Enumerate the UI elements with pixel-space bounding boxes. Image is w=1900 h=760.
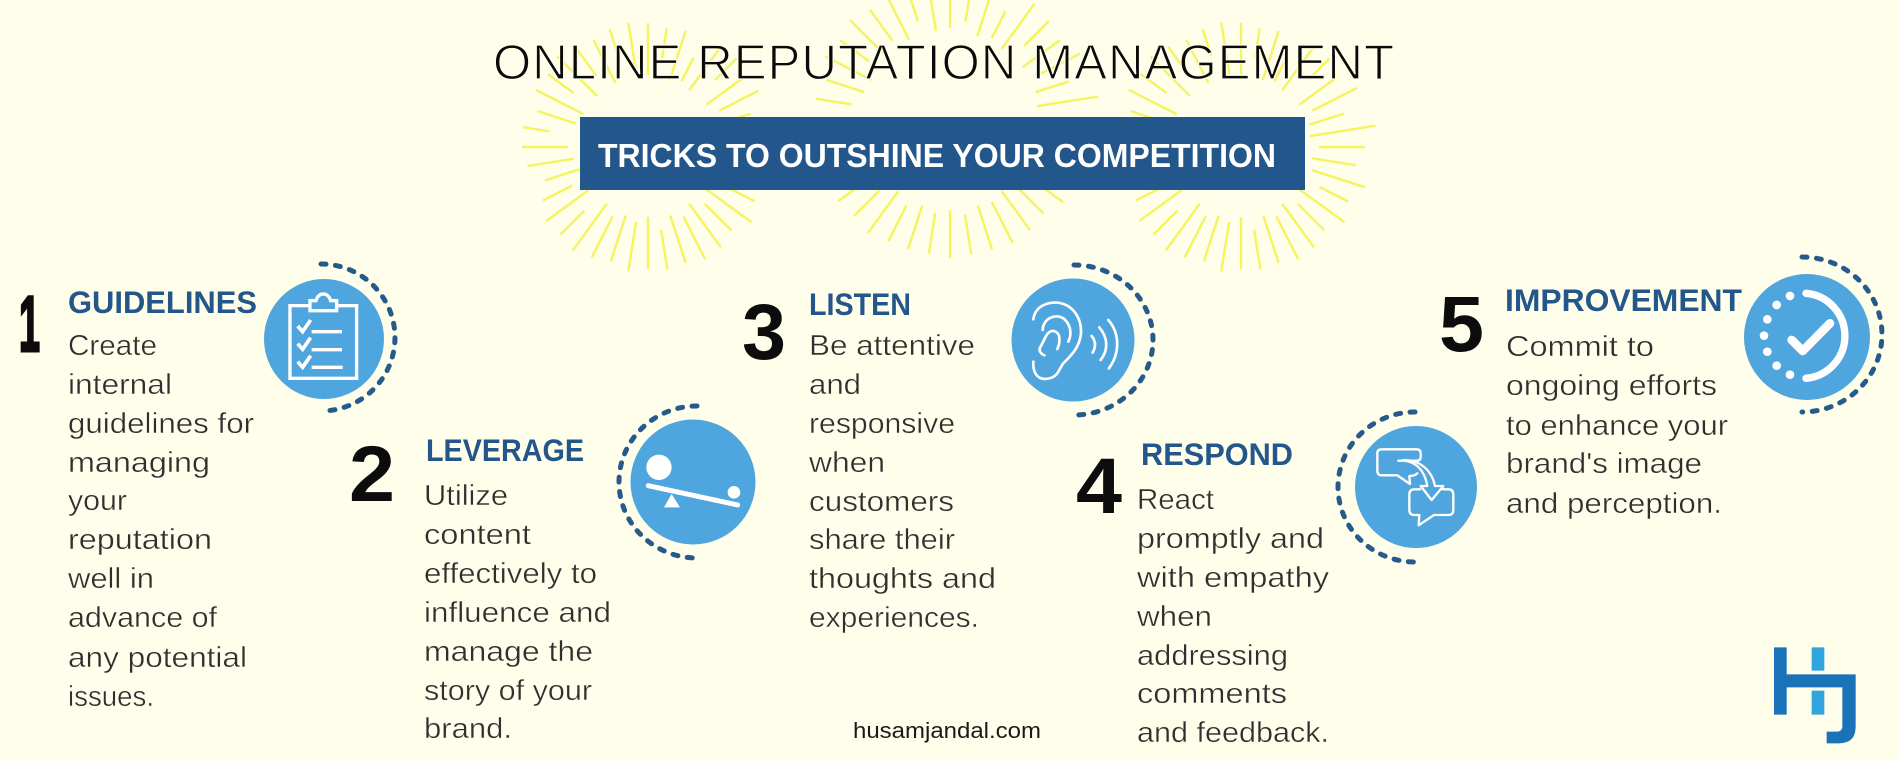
text: respond description (1136, 484, 1330, 749)
text: leverage description: content (424, 519, 531, 551)
icon: clipboard checklist (264, 264, 395, 411)
text: listen description: experiences. (809, 602, 979, 634)
text: respond description: promptly and (1137, 523, 1324, 555)
subtitle banner (580, 117, 1305, 190)
text: listen description: share their (809, 524, 955, 556)
step 4: respond (1076, 412, 1477, 749)
sunburst: right (1115, 23, 1375, 271)
text: respond description: addressing (1137, 640, 1288, 672)
text: listen description: thoughts and (809, 563, 996, 595)
logo: HJ (1774, 647, 1856, 743)
heading: listen: LISTEN (809, 286, 911, 322)
icon: chat bubbles (1338, 412, 1477, 562)
text: guidelines description: managing (68, 447, 210, 479)
text: guidelines description: internal (68, 369, 172, 401)
icon: ear (1012, 265, 1153, 415)
text: improvement description (1506, 331, 1728, 520)
subtitle banner: TRICKS TO OUTSHINE YOUR COMPETITION (598, 137, 1276, 174)
text: listen description: when (808, 447, 885, 479)
heading: guidelines: GUIDELINES (68, 284, 257, 320)
text: improvement description: ongoing efforts (1506, 370, 1717, 402)
text: improvement description: brand's image (1506, 448, 1702, 480)
text: respond description: React (1137, 484, 1214, 516)
sunburst: middle (810, 0, 1098, 258)
text: improvement description: and perception. (1506, 488, 1722, 520)
text: leverage description: manage the (424, 636, 593, 668)
text: respond description: with empathy (1136, 562, 1330, 594)
text: improvement description: to enhance your (1506, 410, 1728, 442)
number 4: 4 (1076, 441, 1122, 530)
text: guidelines description (67, 330, 254, 713)
text: guidelines description: well in (67, 563, 154, 595)
heading: leverage: LEVERAGE (426, 432, 584, 468)
number 2: 2 (349, 429, 395, 518)
step 1: guidelines (19, 264, 395, 713)
text: guidelines description: reputation (68, 524, 212, 556)
text: listen description: responsive (809, 408, 955, 440)
step 2: leverage (349, 406, 756, 745)
text: respond description: and feedback. (1137, 717, 1329, 749)
text: leverage description: effectively to (424, 558, 597, 590)
icon: progress check (1744, 257, 1882, 412)
text: leverage description: story of your (424, 675, 592, 707)
text: leverage description: brand. (424, 713, 512, 745)
text: respond description: when (1136, 601, 1212, 633)
text: guidelines description: advance of (68, 602, 218, 634)
number 3: 3 (742, 287, 786, 376)
sunburst: left (522, 23, 772, 271)
heading: respond: RESPOND (1141, 436, 1293, 472)
text: improvement description: Commit to (1506, 331, 1654, 363)
website footer: husamjandal.com (853, 718, 1041, 743)
text: guidelines description: Create (68, 330, 157, 362)
text: leverage description: influence and (424, 597, 611, 629)
text: listen description: and (809, 369, 861, 401)
step 5: improvement (1439, 257, 1882, 520)
text: guidelines description: guidelines for (68, 408, 254, 440)
text: guidelines description: your (68, 485, 127, 517)
text: leverage description (424, 480, 611, 745)
title: ONLINE REPUTATION MANAGEMENT (493, 36, 1394, 90)
icon: seesaw (619, 406, 756, 558)
text: listen description: Be attentive (809, 330, 975, 362)
step 3: listen (742, 265, 1153, 634)
text: respond description: comments (1137, 678, 1287, 710)
text: leverage description: Utilize (424, 480, 508, 512)
number 5: 5 (1439, 279, 1484, 368)
text: listen description: customers (809, 486, 954, 518)
text: guidelines description: any potential (68, 642, 247, 674)
text: guidelines description: issues. (68, 681, 154, 713)
heading: improvement: IMPROVEMENT (1505, 282, 1742, 318)
step 1: guidelines: 1 (19, 279, 40, 368)
text: listen description (808, 330, 996, 634)
